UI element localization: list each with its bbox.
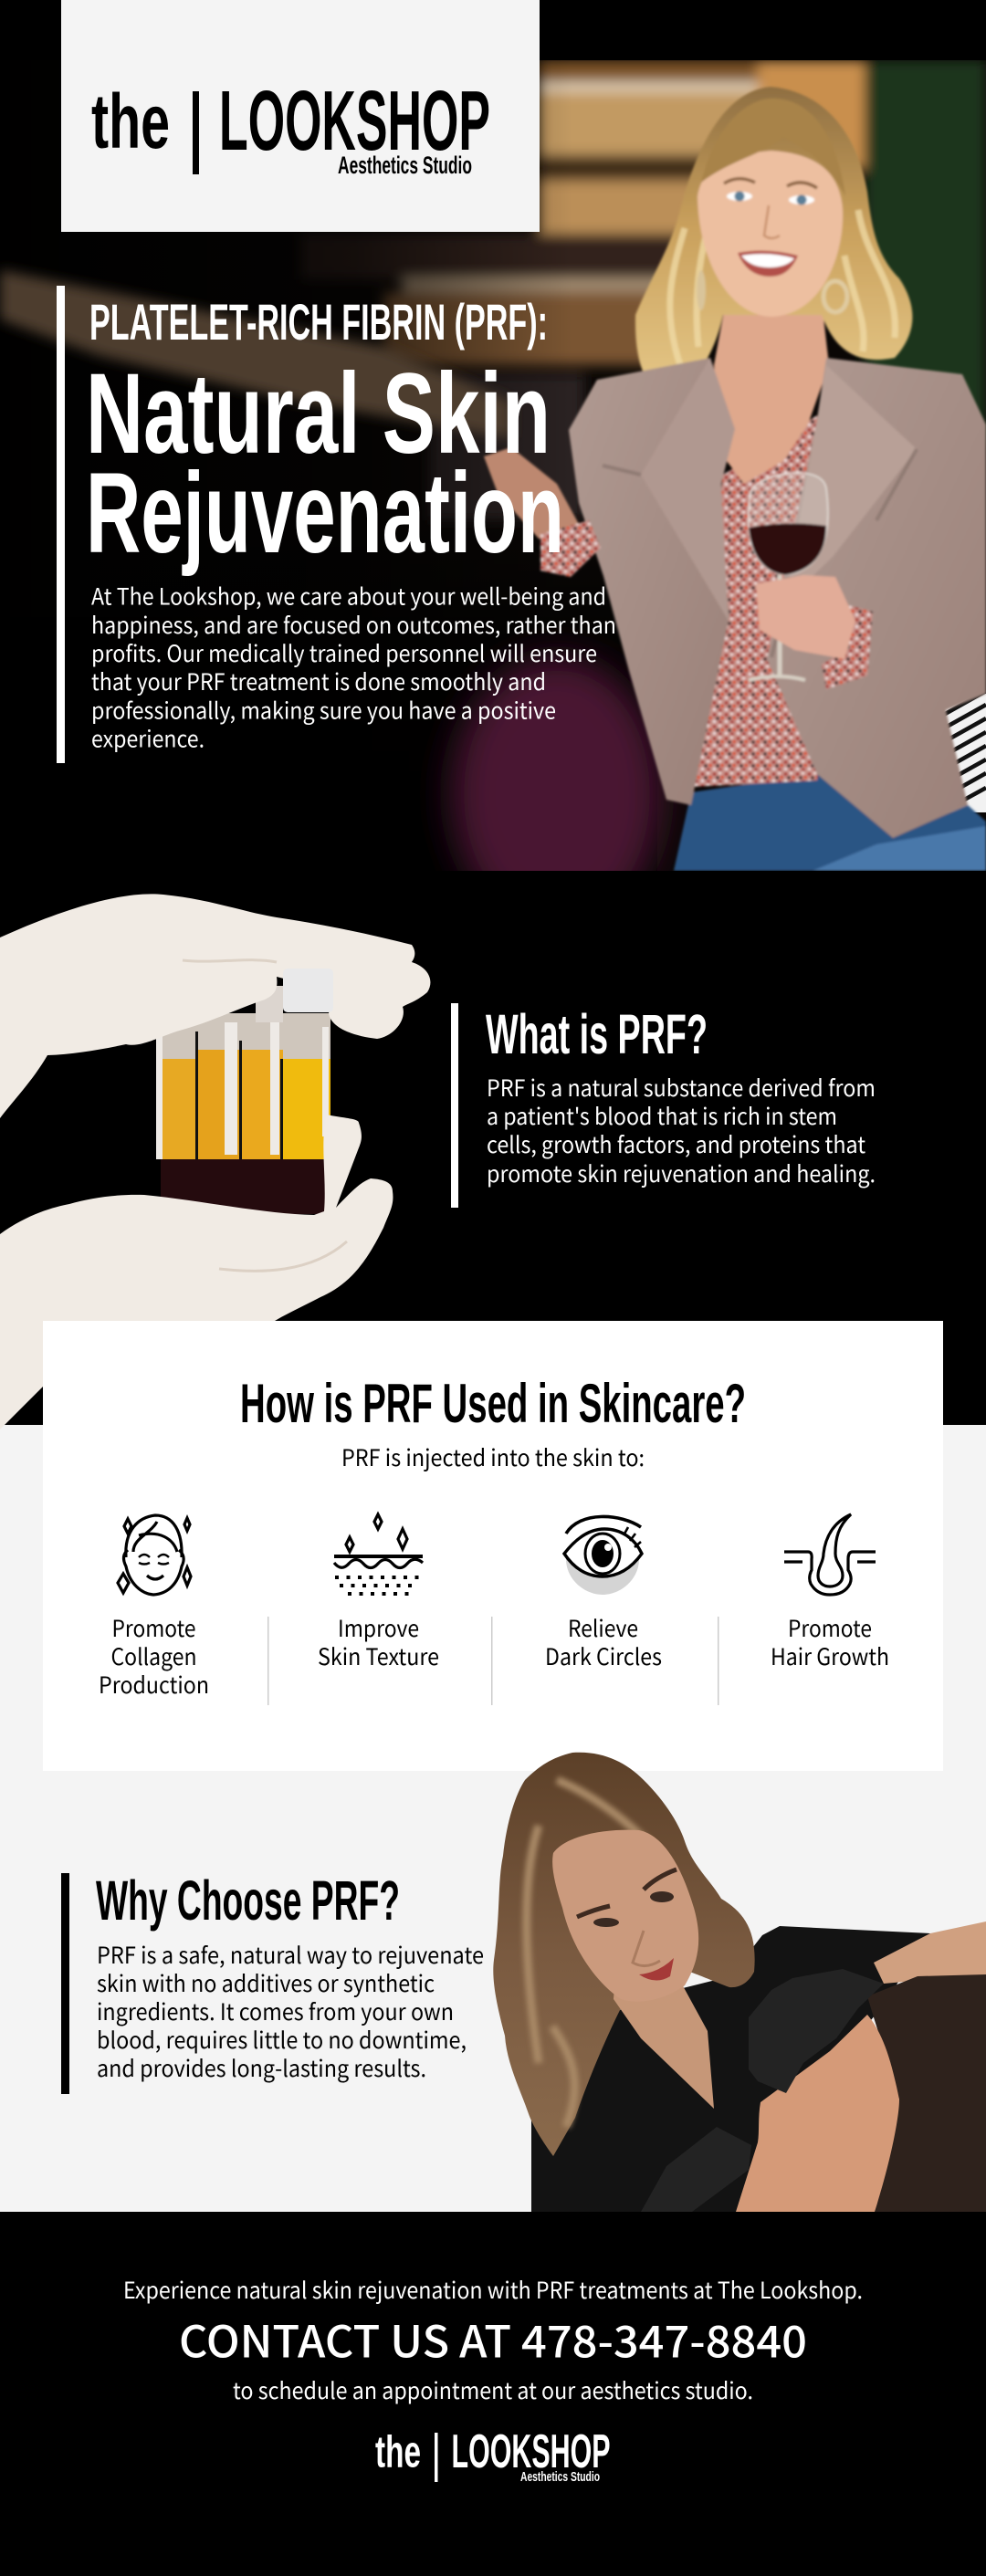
body text: cells, growth factors, and proteins that [487, 1127, 866, 1160]
body text: promote skin rejuvenation and healing. [487, 1157, 876, 1189]
accent bar [451, 1003, 458, 1208]
label: relieve dark circles: Relieve [568, 1611, 638, 1644]
logo panel [61, 0, 540, 232]
earrings [697, 270, 706, 310]
eyes [727, 192, 752, 201]
icon: smiling face with sparkles [118, 1515, 191, 1595]
subheading: PRF is injected into the skin to: [341, 1440, 645, 1473]
lower glove [641, 2127, 751, 2212]
burgundy foreground blur [452, 657, 662, 931]
blurred stairs background [301, 60, 986, 520]
hair highlights [527, 1780, 657, 2127]
hero paragraph [91, 579, 616, 754]
label: promote collagen production [99, 1611, 209, 1701]
label dividers [267, 1617, 719, 1705]
arm [874, 1922, 986, 1984]
logo divider [193, 91, 199, 174]
lapels [791, 368, 915, 577]
woman figure [484, 87, 986, 871]
face [698, 151, 843, 317]
smile [738, 251, 798, 277]
label: promote hair growth: Hair Growth [771, 1639, 889, 1672]
intro line: Experience natural skin rejuvenation with PRF treatments at The Lookshop. [123, 2273, 863, 2306]
neck and chest [614, 1986, 714, 2109]
blouse [691, 415, 835, 787]
left dark overlay [0, 60, 557, 543]
logo: tagline: Aesthetics Studio [338, 152, 472, 179]
aesthetician hair [493, 1753, 755, 2156]
phone number: CONTACT US AT 478-347-8840 [179, 2306, 807, 2370]
hero paragraph: At The Lookshop, we care about your well-being and [91, 579, 606, 612]
main title: Rejuvenation [86, 450, 564, 577]
hero paragraph: that your PRF treatment is done smoothly and [91, 665, 546, 697]
hero paragraph: profits. Our medically trained personnel will ensure [91, 636, 597, 669]
main title [86, 351, 564, 577]
icon: hair follicle [784, 1514, 876, 1595]
label: improve skin texture: Improve [338, 1611, 419, 1644]
jacket right panel [767, 358, 986, 838]
patient face [736, 2015, 899, 2212]
icon: eye with dark circle [564, 1516, 642, 1595]
label: promote collagen production: Production [99, 1668, 209, 1701]
footer call to action [123, 2273, 863, 2485]
lower glove crease [219, 1241, 347, 1271]
label: improve skin texture [318, 1611, 439, 1672]
body text [97, 1938, 484, 2084]
photo: gloved hands holding blood tubes [0, 894, 430, 1429]
hero accent bar [57, 286, 65, 763]
body text: ingredients. It comes from your own [97, 1995, 454, 2027]
hero photo: woman holding wine glass [0, 60, 986, 931]
body text: skin with no additives or synthetic [97, 1966, 435, 1999]
wine hand [756, 575, 855, 659]
lapel shadows [603, 449, 917, 657]
body text: blood, requires little to no downtime, [97, 2023, 467, 2056]
footer logo: LOOKSHOP [451, 2425, 610, 2478]
hero paragraph: happiness, and are focused on outcomes, rather than [91, 608, 616, 641]
body text [487, 1071, 876, 1189]
tubes [156, 986, 330, 1214]
body text: PRF is a safe, natural way to rejuvenate [97, 1938, 484, 1971]
heading: Why Choose PRF? [96, 1869, 400, 1932]
tube cap [283, 969, 333, 1012]
label: relieve dark circles [545, 1611, 662, 1672]
section: Why Choose PRF [61, 1869, 484, 2094]
footer logo: Aesthetics Studio [520, 2469, 600, 2485]
label: promote hair growth: Promote [788, 1611, 872, 1644]
jeans [674, 774, 986, 871]
icon: skin texture [334, 1514, 423, 1594]
hair waves [670, 210, 895, 365]
logo: LOOKSHOP: LOOKSHOP [219, 73, 490, 168]
left raised hand [484, 447, 584, 552]
label: relieve dark circles: Dark Circles [545, 1639, 662, 1672]
body text: a patient's blood that is rich in stem [487, 1099, 837, 1132]
hero paragraph: professionally, making sure you have a positive [91, 694, 556, 727]
left cuff [540, 520, 601, 577]
panel: how PRF is used [43, 1321, 943, 1771]
hero paragraph: experience. [91, 721, 205, 754]
main title: Natural Skin [86, 351, 551, 477]
chair stripes [944, 694, 986, 812]
photo: aesthetician treating patient [493, 1753, 986, 2212]
closing line: to schedule an appointment at our aesthetics studio. [233, 2373, 753, 2406]
upper glove [749, 1969, 884, 2093]
neck and chest [714, 301, 829, 484]
body text: and provides long-lasting results. [97, 2051, 426, 2084]
heading: What is PRF? [486, 1003, 708, 1065]
patient hair [861, 1974, 986, 2212]
eyebrow heading: PLATELET-RICH FIBRIN (PRF): [89, 293, 548, 351]
thumb crease [183, 960, 277, 962]
label: promote hair growth [771, 1611, 889, 1672]
right cuff [822, 604, 873, 689]
blurred beige band [0, 270, 511, 438]
nose and lips [633, 1931, 660, 1966]
accent bar [61, 1873, 69, 2094]
bottom fade [0, 511, 657, 871]
footer logo [375, 2425, 610, 2485]
hero text block [57, 286, 616, 763]
body text: PRF is a natural substance derived from [487, 1071, 876, 1104]
nose [764, 205, 780, 238]
upper glove [0, 894, 430, 1118]
footer logo: the [375, 2428, 421, 2477]
label: promote collagen production: Collagen [111, 1639, 197, 1672]
lower glove [0, 1115, 393, 1429]
wine glass [749, 473, 828, 575]
jacket left panel [569, 358, 730, 805]
forehead hair shade [701, 99, 845, 196]
logo: the: the [91, 79, 170, 164]
section: What is PRF [451, 1003, 876, 1208]
face [552, 1830, 698, 2002]
eyes and brows [577, 1869, 677, 1917]
hair [635, 87, 912, 394]
label: improve skin texture: Skin Texture [318, 1639, 439, 1672]
scrubs [531, 1926, 930, 2212]
label: promote collagen production: Promote [111, 1611, 195, 1644]
